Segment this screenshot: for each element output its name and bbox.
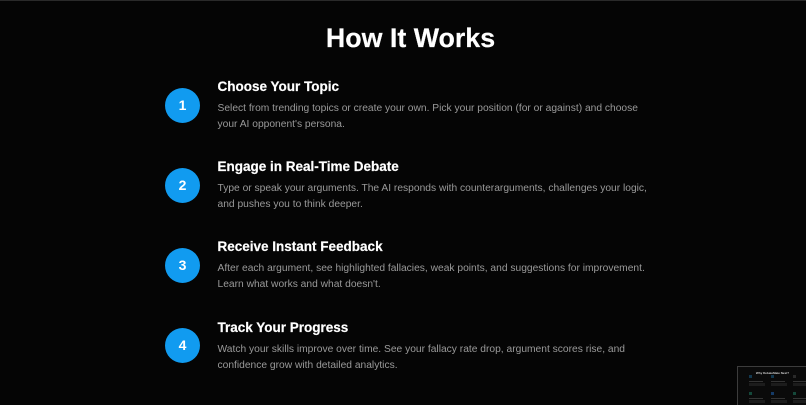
icon: number 2: 2 xyxy=(179,177,186,193)
step 4 xyxy=(165,320,625,371)
heading: Receive Instant Feedback: Receive Instant Feedback xyxy=(218,239,383,254)
icon: number 3 xyxy=(165,248,200,283)
icon: number 1: 1 xyxy=(179,97,186,113)
thumbnail preview xyxy=(737,366,806,405)
heading: Choose Your Topic: Choose Your Topic xyxy=(218,79,339,94)
thumbnail heading: Why DebateMate Next? xyxy=(756,371,789,375)
text: step 1 description xyxy=(218,103,638,130)
step 1 xyxy=(165,79,638,130)
text: step 3 description: Learn what works and what doesn't. xyxy=(218,279,381,290)
icon: number 4 xyxy=(165,328,200,363)
text: step 1 description: Select from trending topics or create your own. Pick your position (for or against) and choose xyxy=(218,103,638,114)
step 3 xyxy=(165,239,645,290)
text: step 3 description xyxy=(218,263,645,290)
icon: number 2 xyxy=(165,168,200,203)
icon: number 4: 4 xyxy=(179,337,186,353)
text: step 2 description xyxy=(218,183,647,210)
thumbnail feature grid xyxy=(749,375,806,403)
heading: Track Your Progress: Track Your Progress xyxy=(218,320,348,335)
text: step 2 description: and pushes you to think deeper. xyxy=(218,199,363,210)
icon: number 3: 3 xyxy=(179,257,186,273)
text: step 4 description: confidence grow with detailed analytics. xyxy=(218,360,398,371)
top edge strip xyxy=(0,0,806,1)
text: step 4 description xyxy=(218,344,625,371)
text: step 2 description: Type or speak your arguments. The AI responds with counterarguments, challenges your logic, xyxy=(218,183,647,194)
text: step 1 description: your AI opponent's persona. xyxy=(218,119,345,130)
title: How It Works xyxy=(326,23,495,53)
step 2 xyxy=(165,159,647,210)
text: step 3 description: After each argument, see highlighted fallacies, weak points, and suggestions for improvement. xyxy=(218,263,645,274)
text: step 4 description: Watch your skills improve over time. See your fallacy rate drop, argument scores rise, and xyxy=(218,344,625,355)
icon: number 1 xyxy=(165,88,200,123)
heading: Engage in Real-Time Debate: Engage in Real-Time Debate xyxy=(218,159,399,174)
